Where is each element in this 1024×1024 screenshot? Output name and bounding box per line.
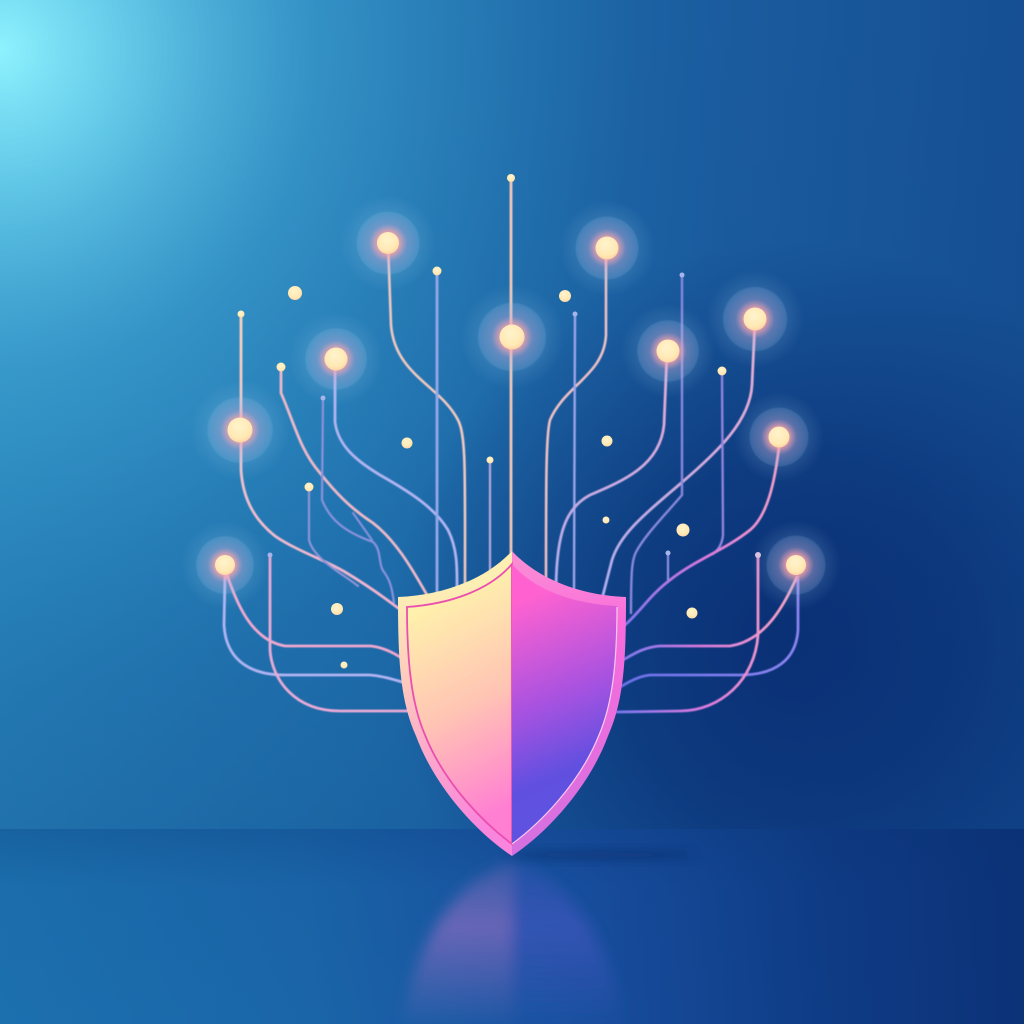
shield left face	[407, 564, 512, 844]
wires: left outer	[224, 314, 408, 711]
wires: right inner	[546, 248, 755, 613]
shield rim left	[398, 551, 512, 856]
shield right face	[512, 564, 617, 844]
wires: center	[510, 178, 512, 555]
shield reflection	[402, 862, 624, 1024]
wires: left inner	[281, 243, 490, 602]
small dots	[238, 174, 726, 668]
small wire caps	[268, 272, 761, 558]
circuit wires	[224, 178, 798, 712]
node cores	[215, 232, 806, 575]
floor	[0, 829, 1024, 1024]
shield rim right	[512, 551, 626, 856]
shield right inner highlight	[512, 607, 617, 844]
shield ground shadow	[505, 851, 695, 859]
glowing nodes	[181, 174, 841, 668]
node halos	[181, 195, 841, 610]
wires: right outer	[617, 447, 798, 712]
shield	[398, 551, 695, 859]
